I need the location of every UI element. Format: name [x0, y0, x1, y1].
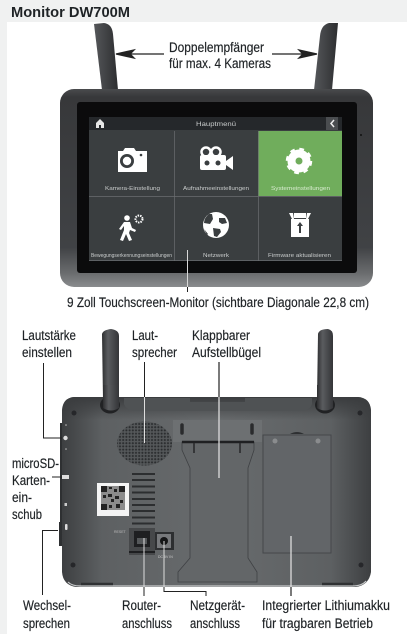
front monitor — [60, 23, 373, 287]
callout line: touchscreen — [186, 250, 188, 287]
rear monitor — [59, 329, 371, 587]
icon: right antenna — [314, 23, 338, 90]
bottom highlight — [68, 581, 366, 586]
icon: left antenna — [94, 23, 118, 90]
callout: Lautstärke — [22, 328, 76, 438]
speaker grille — [117, 422, 172, 466]
battery details — [272, 432, 320, 444]
callout line: touchscreen lower — [186, 287, 188, 292]
callout: Netzgerätanschluss: anschluss — [190, 616, 240, 631]
icon: motion detection — [119, 215, 142, 241]
callout: touchscreen size: 9 Zoll Touchscreen-Monitor (sichtbare Diagonale 22,8 cm) — [67, 295, 369, 310]
callout: Doppelempfänger — [116, 40, 317, 71]
callout: Netzgerätanschluss: Netzgerät- — [190, 598, 245, 613]
rest label: RESET — [114, 530, 127, 534]
camera dot — [360, 134, 362, 136]
antenna hinges — [100, 385, 335, 414]
callout: Wechselsprechen — [23, 530, 71, 631]
callout: Doppelempfänger: für max. 4 Kameras — [169, 56, 271, 71]
grid lines — [89, 131, 342, 261]
icon: camera — [118, 148, 147, 172]
arrow: right antenna — [272, 50, 317, 58]
monitor bezel — [60, 89, 373, 287]
top shading — [62, 397, 371, 420]
top bevel — [124, 398, 312, 411]
icon: gear — [288, 150, 310, 172]
callout: microSD — [12, 456, 62, 522]
side buttons — [59, 423, 69, 546]
callout: Doppelempfänger: Doppelempfänger — [169, 40, 264, 55]
tile label: Kamera-Einstellung: Kamera-Einstellung — [105, 186, 160, 192]
folding stand — [178, 442, 257, 582]
callout: Lithiumakku: für tragbaren Betrieb — [262, 616, 373, 631]
callout: Aufstellbügel: Aufstellbügel — [192, 345, 261, 360]
icon: globe — [203, 212, 229, 238]
battery cover — [263, 435, 331, 553]
hook recess — [173, 420, 262, 442]
callout: microSD: ein- — [12, 490, 32, 505]
bottom feet — [81, 583, 353, 585]
router port — [129, 528, 155, 555]
callout: Lithiumakku — [262, 536, 390, 631]
QR code — [97, 483, 129, 516]
icon: rear left antenna — [102, 329, 119, 400]
stand hooks — [182, 425, 252, 433]
callout: Lithiumakku: Integrierter Lithiumakku — [262, 598, 390, 613]
callout: Wechselsprechen: sprechen — [23, 616, 70, 631]
screen surround — [77, 102, 357, 273]
stand pegs — [194, 443, 240, 453]
rear housing — [62, 397, 371, 587]
header text: Hauptmenü — [196, 121, 236, 128]
callout: Aufstellbügel: Klappbarer — [192, 328, 250, 343]
tile label: Netzwerk: Netzwerk — [203, 253, 230, 259]
callout: Lautstärke: einstellen — [22, 345, 72, 360]
icon: video camera — [200, 148, 233, 170]
callout: microSD: schub — [12, 507, 42, 522]
callout: Lautsprecher: Laut- — [132, 328, 158, 343]
tile label: Firmware: Firmware aktualisieren — [268, 253, 331, 259]
callout: Wechselsprechen: Wechsel- — [23, 598, 71, 613]
callout: microSD: microSD- — [12, 456, 59, 471]
screen background — [89, 117, 342, 261]
callout: Lautstärke: Lautstärke — [22, 328, 76, 343]
touchscreen menu — [89, 117, 342, 261]
callout: Routeranschluss: anschluss — [122, 616, 172, 631]
ventilation slots — [132, 474, 155, 524]
tile label: Bewegungserkennung: Bewegungserkennungseinstellungen — [91, 253, 172, 259]
tile label: Systemeinstellungen: Systemeinstellungen — [271, 186, 330, 192]
back button — [326, 117, 338, 130]
icon: firmware box — [289, 213, 311, 237]
callout: Netzgerätanschluss — [164, 541, 245, 631]
stand top edge — [182, 441, 254, 443]
callout: Routeranschluss — [122, 538, 172, 631]
callout: Routeranschluss: Router- — [122, 598, 161, 613]
power port — [155, 532, 174, 550]
callout: Lautsprecher — [132, 328, 177, 443]
power label: DC 5V IN — [158, 555, 173, 559]
menu header — [89, 117, 342, 130]
title: Monitor DW700M — [11, 5, 130, 21]
icon: rear right antenna — [317, 329, 333, 400]
callout: Aufstellbügel — [192, 328, 261, 478]
green tile: Systemeinstellungen — [258, 131, 342, 196]
icon: home — [96, 119, 104, 128]
callout: microSD: Karten- — [12, 473, 50, 488]
tile label: Aufnahmeeinstellungen: Aufnahmeeinstellungen — [183, 186, 249, 192]
callout: Lautsprecher: sprecher — [132, 345, 177, 360]
corner screws — [70, 410, 364, 568]
arrow: left antenna — [116, 50, 164, 58]
